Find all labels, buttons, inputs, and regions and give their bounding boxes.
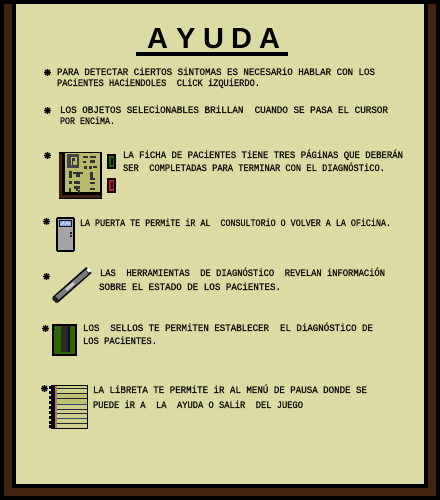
bullet 3: patient file: SER COMPLETADAS PARA TERMINAR CON EL DIAGNÓSTiCO. [123, 161, 385, 175]
bullet 2: selectable objects: LOS OBJETOS SELECiONABLES BRiLLAN CUANDO SE PASA EL CURSOR [60, 105, 389, 117]
icon: pen tool [54, 269, 90, 301]
bullet 1: symptoms: PARA DETECTAR CiERTOS SiNTOMAS ES NECESARiO HABLAR CON LOS [57, 67, 375, 79]
bullet 7: notebook: PUEDE iR A LA AYUDA O SALiR DEL JUEGO [93, 400, 303, 412]
bullet 5: diagnostic tools [43, 266, 385, 301]
icon: red tab [107, 178, 116, 193]
icon: notebook [49, 385, 88, 429]
bullet 2: selectable objects [44, 105, 389, 128]
bullet 3: patient file [44, 148, 403, 199]
bullet 5: diagnostic tools: SOBRE EL ESTADO DE LOS PACiENTES. [99, 282, 281, 294]
bullet 6: stamps: LOS SELLOS TE PERMiTEN ESTABLECER EL DiAGNÓSTiCO DE [83, 321, 373, 335]
title: AYUDA [147, 23, 280, 55]
bullet 7: notebook [41, 383, 367, 429]
bullet 1: symptoms [44, 67, 375, 90]
bullet 4: door [43, 217, 391, 252]
bullet 5: diagnostic tools: LAS HERRAMIENTAS DE DIAGNÓSTiCO REVELAN iNFORMACiÓN [100, 266, 385, 280]
bullet 2: selectable objects: POR ENCiMA. [60, 116, 115, 128]
bullet 1: symptoms: PACiENTES HACiENDOLES CLiCK iZQUiERDO. [57, 78, 260, 90]
bullet 6: stamps [42, 321, 373, 356]
bullet 7: notebook: LA LiBRETA TE PERMiTE iR AL MENÚ DE PAUSA DONDE SE [93, 383, 367, 397]
icon: green tab [107, 154, 116, 169]
bullet 6: stamps: LOS PACiENTES. [83, 336, 157, 348]
icon: stamp [52, 324, 77, 356]
icon: door [56, 217, 75, 252]
icon: patient file [59, 152, 102, 199]
